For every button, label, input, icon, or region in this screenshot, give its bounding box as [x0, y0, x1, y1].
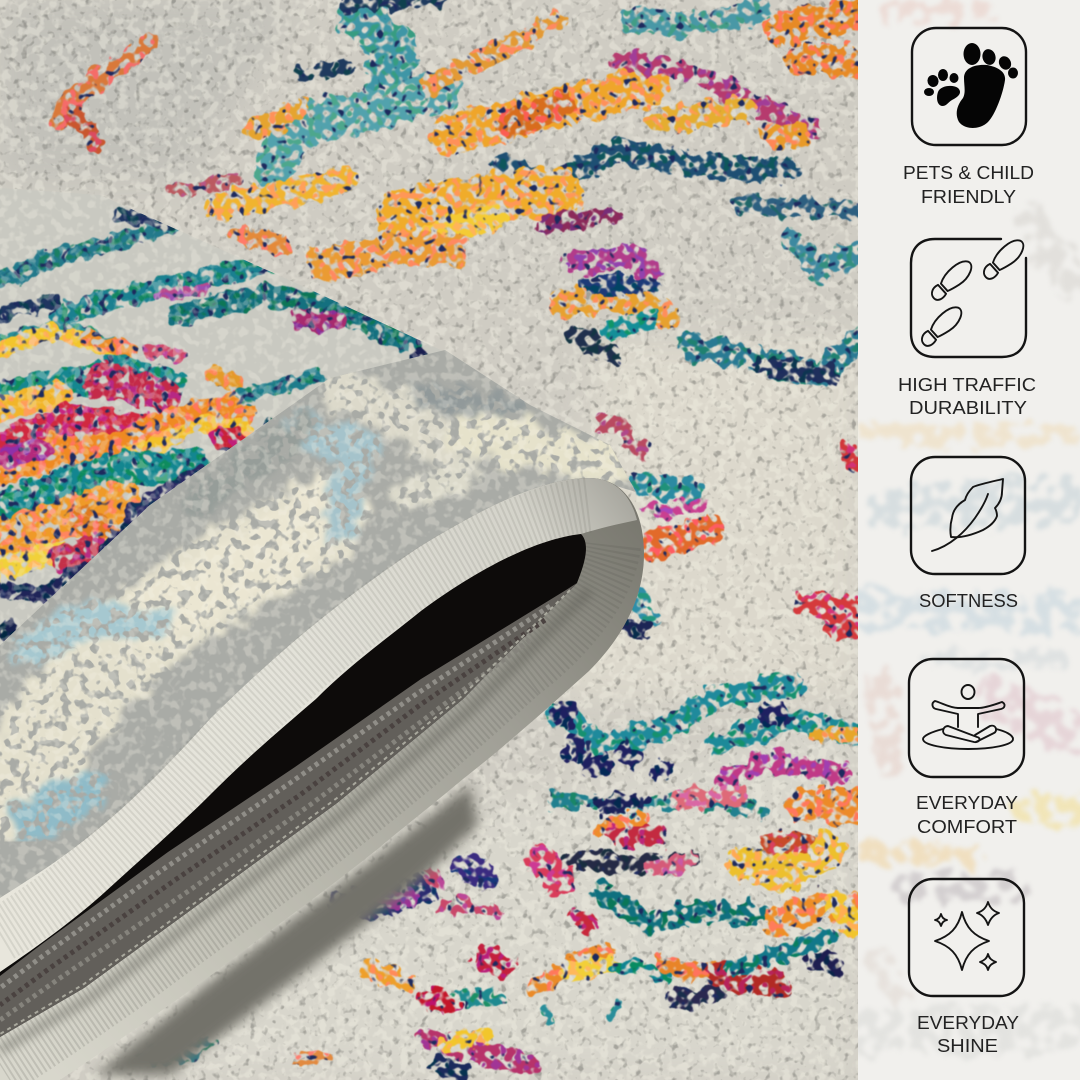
rug underside: dark cavity: [0, 534, 586, 1037]
icon: footprints: [911, 236, 1028, 357]
label: EVERYDAY: [917, 1013, 1019, 1033]
label: PETS & CHILD: [903, 163, 1034, 183]
label: EVERYDAY: [916, 793, 1018, 813]
label: [898, 375, 1036, 418]
icon: sparkles: [909, 879, 1024, 996]
label: DURABILITY: [909, 398, 1027, 418]
feature: pets and child friendly: [903, 28, 1034, 207]
feature: softness: [911, 457, 1025, 611]
label: SHINE: [937, 1036, 998, 1056]
feature: high traffic durability: [898, 236, 1036, 418]
panel: translucent feature sidebar: [858, 0, 1080, 1080]
label: [903, 163, 1034, 207]
binding: rib texture: [0, 505, 610, 1065]
label: FRIENDLY: [921, 187, 1016, 207]
label: SOFTNESS: [919, 591, 1018, 611]
shadow beneath rolled rug: [95, 785, 478, 1075]
label: [916, 793, 1018, 837]
fold: soft pile: [0, 340, 660, 910]
icon: baby foot and paw: [912, 28, 1026, 145]
fold: colourful pattern: [0, 180, 460, 650]
binding: upper white band: [0, 478, 637, 972]
binding: whole outer shape: [0, 478, 644, 1080]
label: COMFORT: [917, 817, 1017, 837]
rolled rug corner: [0, 189, 644, 1080]
rug underside: woven backing: [0, 583, 577, 1037]
label: HIGH TRAFFIC: [898, 375, 1036, 395]
label: [917, 1013, 1019, 1056]
binding: inner shade on stitched side: [0, 590, 590, 1050]
icon: meditating figure: [909, 659, 1024, 777]
icon: feather: [911, 457, 1025, 574]
fold: yarn grain: [0, 188, 634, 898]
feature: everyday comfort: [909, 659, 1024, 837]
feature: everyday shine: [909, 879, 1024, 1056]
